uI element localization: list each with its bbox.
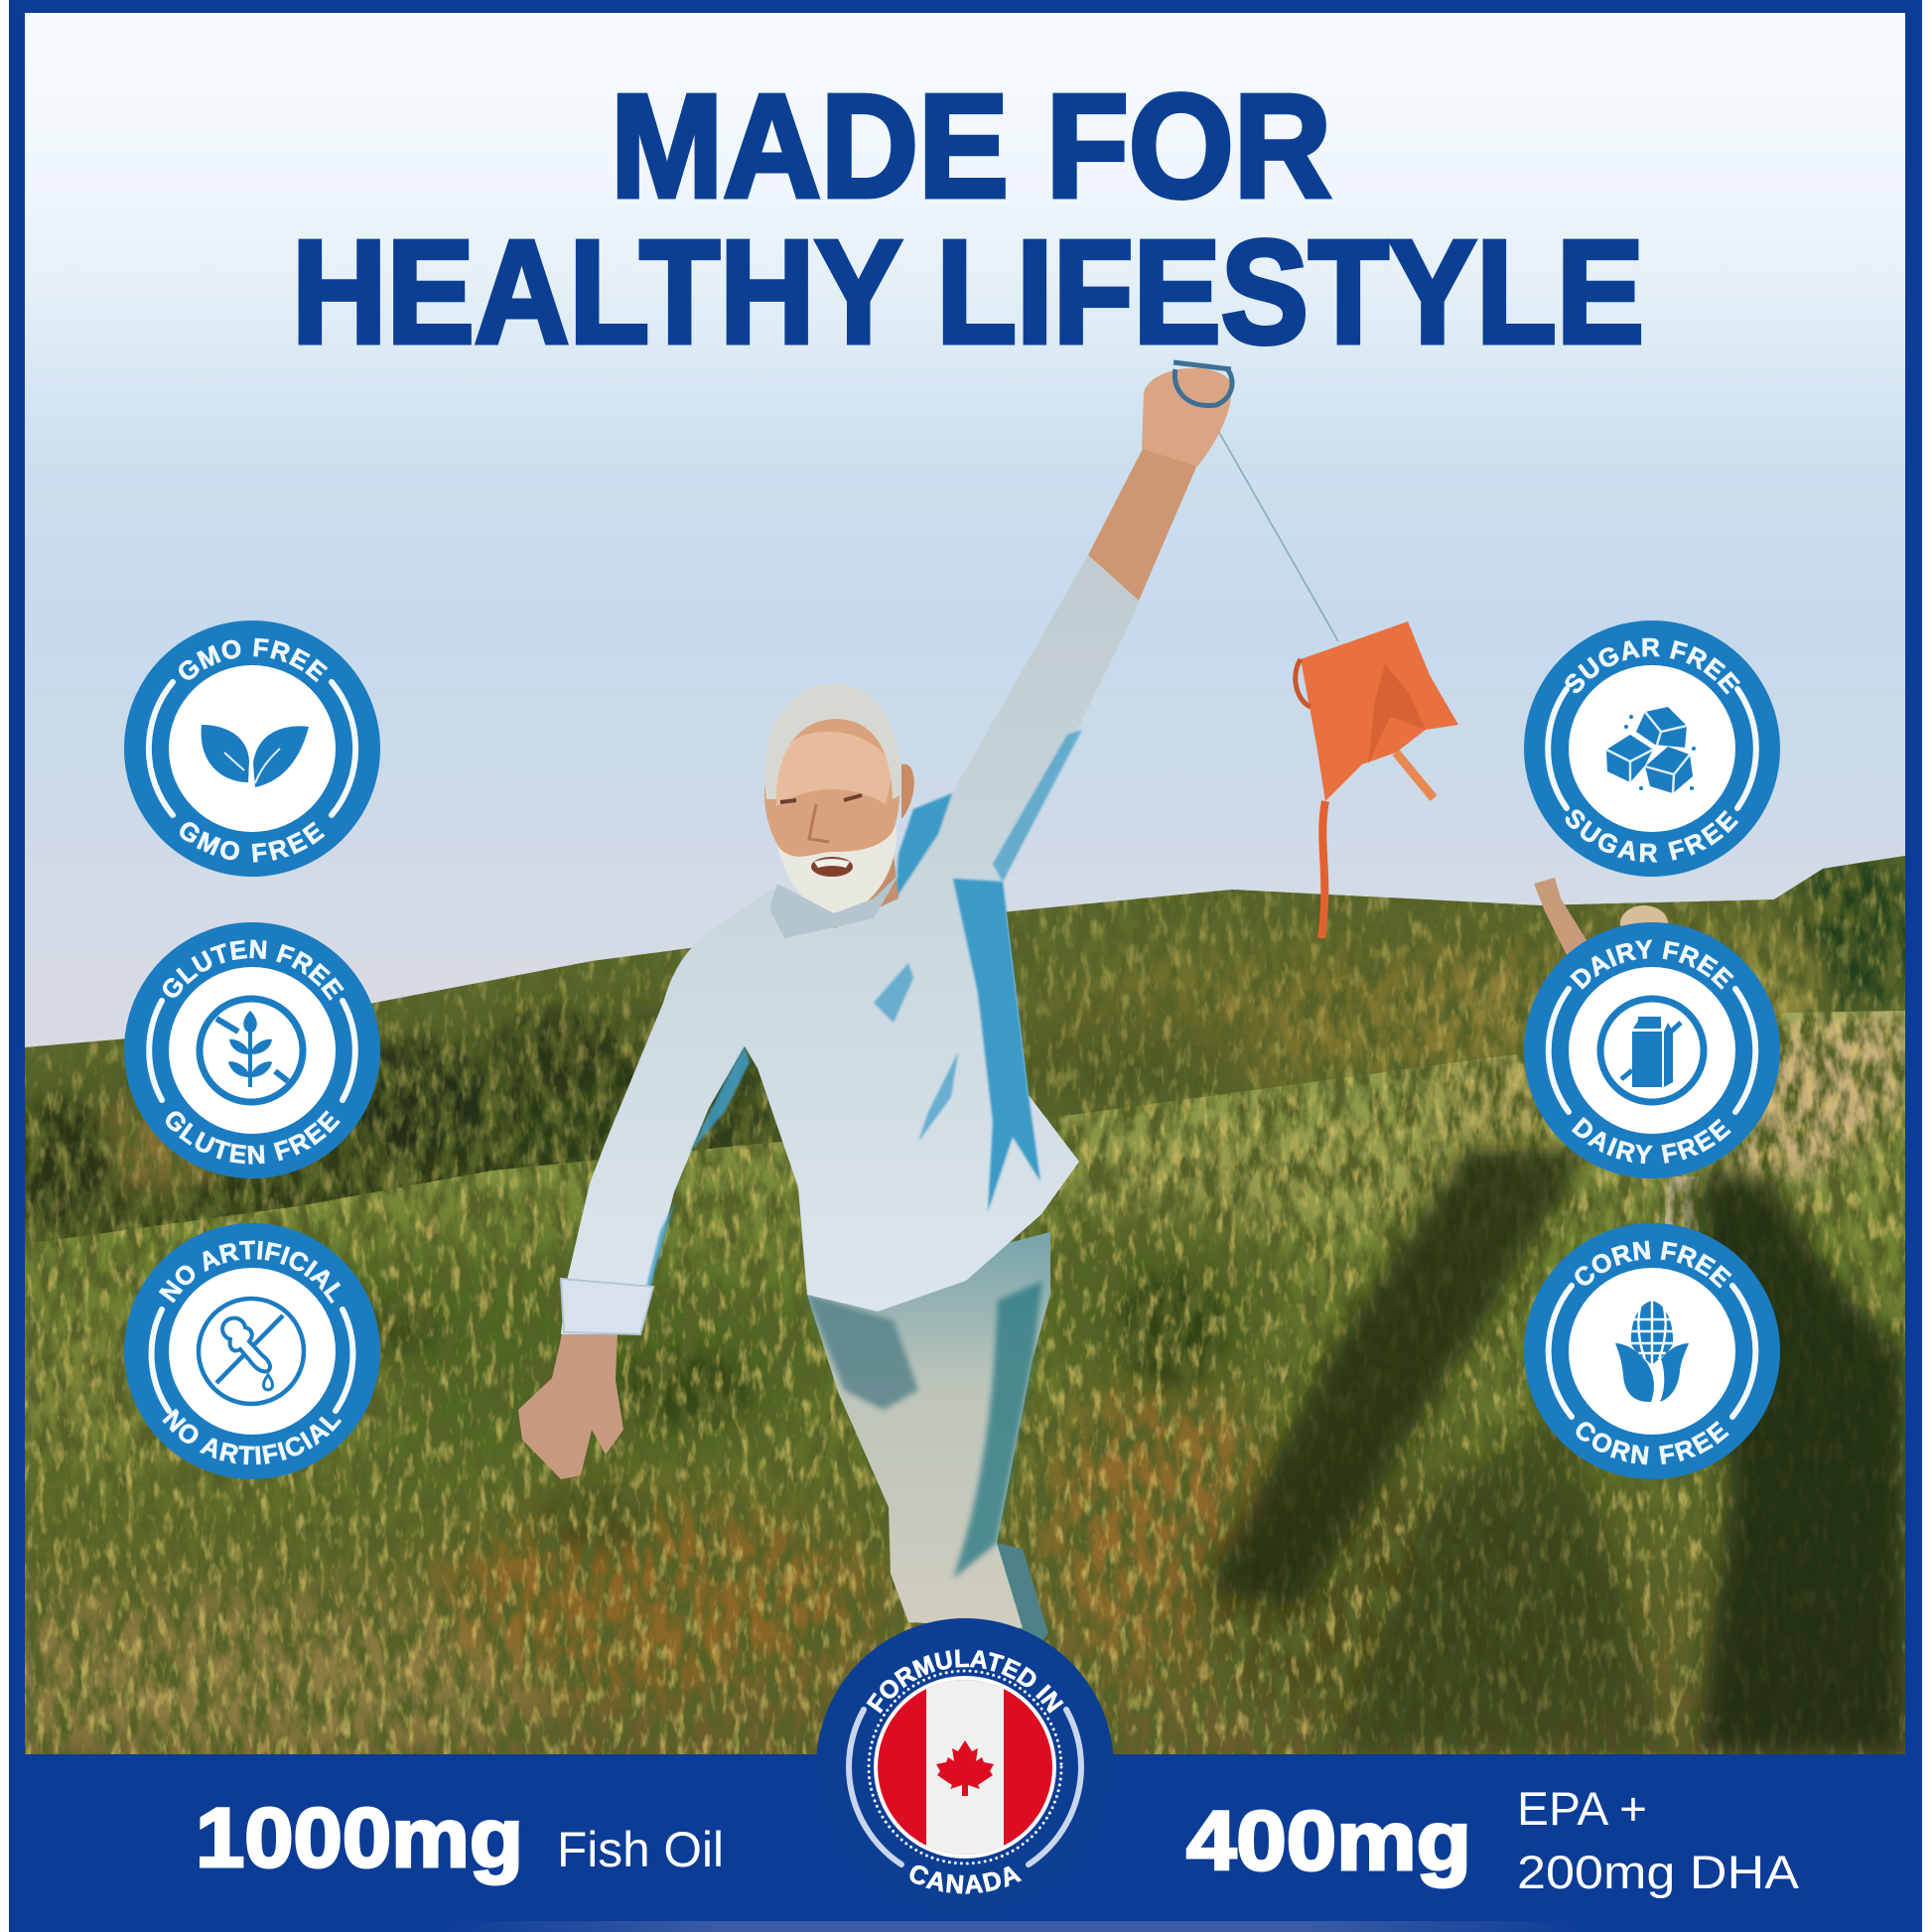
badge: corn free	[1524, 1223, 1780, 1479]
shirt collar	[769, 874, 899, 938]
title: MADE FOR	[611, 65, 1331, 228]
badge: GMO free: GMO FREE	[180, 821, 326, 863]
stat: 1000mg fish oil	[196, 1791, 724, 1884]
stat: 1000mg fish oil: Fish Oil	[557, 1822, 724, 1877]
photo: distant hills and trees	[25, 856, 1905, 1244]
badge: gluten free	[124, 922, 380, 1178]
badge: formulated in Canada: CANADA	[909, 1864, 1023, 1894]
photo: grass meadow	[0, 1011, 1905, 1757]
icon: crossed milk carton	[1600, 999, 1704, 1102]
stat: 400mg EPA + 200mg DHA: 400mg	[1186, 1794, 1471, 1887]
man with raised arm	[518, 362, 1232, 1653]
badge: GMO free: GMO FREE	[179, 637, 328, 683]
shirt blue shadows	[638, 730, 1082, 1330]
icon: corn cob	[1615, 1301, 1689, 1402]
badge: formulated in Canada	[816, 1618, 1114, 1894]
bottom info band	[9, 1754, 1922, 1932]
badge: dairy free	[1524, 922, 1780, 1178]
head and face	[764, 684, 914, 928]
icon: crossed dropper	[199, 1299, 304, 1404]
badge: no artificial	[124, 1223, 380, 1479]
icon: crossed wheat	[200, 999, 303, 1102]
title	[292, 65, 1644, 374]
stat: 1000mg fish oil: 1000mg	[196, 1791, 523, 1884]
photo: sky background	[25, 13, 1905, 1304]
kite	[1213, 422, 1458, 938]
badge: corn free: CORN FREE	[1577, 1421, 1729, 1465]
icon: sugar cubes	[1606, 707, 1696, 793]
lowered hand	[518, 1330, 623, 1479]
badge: sugar free: SUGAR FREE	[1565, 809, 1739, 862]
raised forearm and hand	[1088, 362, 1232, 601]
badge: sugar free	[1524, 621, 1780, 877]
photo: long shadows on the grass	[1206, 1146, 1905, 1754]
icon: Canadian flag	[876, 1678, 1054, 1857]
badge: gluten free: GLUTEN FREE	[163, 939, 345, 1001]
badge: dairy free: DAIRY FREE	[1570, 939, 1734, 990]
badge: dairy free: DAIRY FREE	[1571, 1116, 1731, 1164]
shirt	[561, 555, 1139, 1334]
title: HEALTHY LIFESTYLE	[292, 210, 1644, 374]
badge: sugar free: SUGAR FREE	[1565, 637, 1741, 695]
badge: corn free: CORN FREE	[1575, 1241, 1731, 1289]
stat: 400mg EPA + 200mg DHA: 200mg DHA	[1517, 1846, 1800, 1898]
photo: background person waving	[1534, 878, 1668, 955]
badge: gluten free: GLUTEN FREE	[166, 1110, 341, 1165]
jeans	[807, 1232, 1050, 1653]
badge: no artificial: NO ARTIFICIAL	[162, 1408, 342, 1465]
badge: GMO free	[124, 621, 380, 877]
shirt cuff	[561, 1279, 653, 1334]
badge: no artificial: NO ARTIFICIAL	[159, 1241, 342, 1305]
badge: formulated in Canada: FORMULATED IN	[866, 1650, 1064, 1714]
stat: 400mg EPA + 200mg DHA	[1186, 1782, 1800, 1898]
icon: leaves	[202, 725, 309, 787]
stat: 400mg EPA + 200mg DHA: EPA +	[1517, 1782, 1647, 1835]
